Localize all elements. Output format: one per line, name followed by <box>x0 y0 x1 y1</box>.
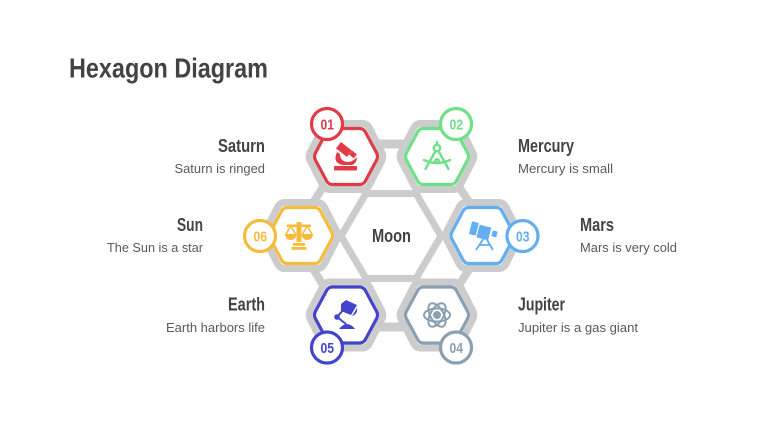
text block: earth <box>166 294 265 335</box>
hexagon 05 earth <box>312 287 378 363</box>
hexagon 01 saturn <box>312 108 378 184</box>
badge 04: 04 <box>450 340 464 357</box>
text block: jupiter <box>518 294 638 335</box>
hexagon 02 mercury <box>405 108 472 184</box>
hexagon diagram <box>244 108 538 363</box>
hexagon 03 mars <box>451 208 538 264</box>
text block: saturn: Saturn <box>218 136 265 156</box>
badge 02: 02 <box>450 116 463 134</box>
icon: compass <box>424 142 450 169</box>
text block: sun: Sun <box>177 215 203 235</box>
text block: jupiter: Jupiter is a gas giant <box>518 320 638 335</box>
text block: earth: Earth harbors life <box>166 320 265 335</box>
text block: earth: Earth <box>228 294 265 314</box>
icon: microscope <box>334 142 357 170</box>
text block: jupiter: Jupiter <box>518 294 565 314</box>
text block: mercury <box>518 136 613 176</box>
badge 05: 05 <box>320 340 334 357</box>
gray honeycomb frame <box>264 124 519 348</box>
text block: mars: Mars is very cold <box>580 240 677 255</box>
hexagon 06 sun <box>244 208 333 264</box>
hexagon 04 jupiter <box>405 287 472 363</box>
badge 03: 03 <box>516 228 530 246</box>
icon: desk lamp <box>334 300 357 329</box>
icon: atom <box>424 300 450 330</box>
text block: mercury: Mercury is small <box>518 161 613 176</box>
title: Hexagon Diagram <box>69 52 268 84</box>
text block: sun <box>107 215 204 255</box>
icon: telescope <box>469 221 498 250</box>
icon: scales <box>285 222 313 250</box>
text block: saturn <box>174 136 265 176</box>
badge 01: 01 <box>320 116 334 134</box>
text block: mars <box>580 215 677 255</box>
moon center label: Moon <box>372 226 411 246</box>
text block: mercury: Mercury <box>518 136 574 156</box>
badge 06: 06 <box>254 228 267 246</box>
text block: saturn: Saturn is ringed <box>174 161 265 176</box>
text block: mars: Mars <box>580 215 614 235</box>
text block: sun: The Sun is a star <box>107 240 204 255</box>
